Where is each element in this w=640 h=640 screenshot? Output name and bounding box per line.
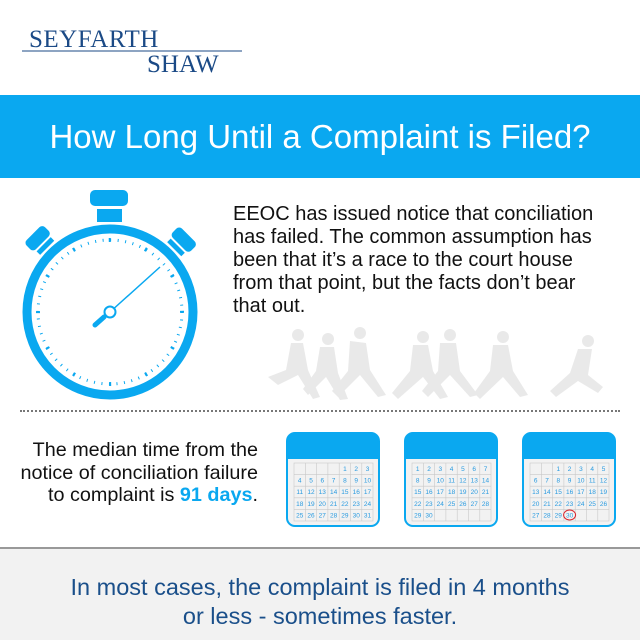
calendar: month 3: 20 [532, 501, 540, 508]
median text: notice of conciliation failure [20, 462, 258, 484]
calendar: month 2: 1 [416, 466, 420, 473]
calendar: month 1: 25 [296, 512, 304, 519]
calendar: month 3: 27 [532, 512, 540, 519]
calendar: month 2: 28 [482, 501, 489, 508]
calendar: month 1: 20 [319, 501, 326, 508]
calendar: month 3: 2 [568, 466, 572, 473]
calendar: month 2: 4 [450, 466, 454, 473]
calendar: month 1: 8 [343, 478, 347, 485]
calendar: month 1: 27 [319, 512, 326, 519]
calendar: month 2: 11 [448, 478, 455, 485]
calendar: month 2: 6 [472, 466, 476, 473]
calendar: month 2: 14 [482, 478, 489, 485]
calendar: month 3: 23 [566, 501, 574, 508]
calendar: month 1: 3 [366, 466, 370, 473]
runners silhouettes [268, 327, 603, 400]
calendar: month 1: 4 [298, 478, 302, 485]
calendar: month 3: 12 [600, 478, 607, 485]
calendar: month 3: 30 [566, 512, 574, 519]
intro text: EEOC has issued notice that conciliation [233, 203, 593, 225]
footer band: In most cases, the complaint is filed in 4 months [71, 574, 569, 600]
dotted divider [20, 410, 620, 412]
calendar: month 2: 16 [425, 489, 433, 496]
calendar: month 3: 5 [602, 466, 606, 473]
calendar: month 3: 3 [579, 466, 583, 473]
title banner [0, 95, 640, 178]
logo: SEYFARTH [29, 26, 159, 53]
calendar: month 2: 5 [461, 466, 465, 473]
calendar: month 1 [287, 433, 379, 526]
calendar: month 2: 8 [416, 478, 420, 485]
intro text: been that it’s a race to the court house [233, 249, 573, 271]
intro text [233, 203, 593, 317]
intro text: that out. [233, 295, 305, 317]
calendar: month 1: 16 [353, 489, 360, 496]
calendar: month 2: 18 [448, 489, 456, 496]
calendar: month 3: 1 [556, 466, 560, 473]
title banner: How Long Until a Complaint is Filed? [49, 118, 591, 155]
calendar: month 2: 22 [414, 501, 422, 508]
calendar: month 3: 29 [555, 512, 562, 519]
calendar: month 3: 6 [534, 478, 538, 485]
calendar: month 1: 10 [364, 478, 371, 485]
calendar: month 3: 19 [600, 489, 607, 496]
calendar: month 1: 14 [330, 489, 338, 496]
calendar: month 2: 20 [471, 489, 478, 496]
calendar: month 2: 13 [471, 478, 478, 485]
calendar: month 1: 12 [307, 489, 315, 496]
calendar: month 2: 29 [414, 512, 422, 519]
calendar: month 2: 15 [414, 489, 422, 496]
calendar: month 2: 24 [437, 501, 444, 508]
footer band: or less - sometimes faster. [183, 603, 457, 629]
calendar: month 3: 15 [555, 489, 562, 496]
calendar: month 1: 5 [309, 478, 313, 485]
calendar: month 3: 8 [556, 478, 560, 485]
calendar: month 1: 29 [341, 512, 349, 519]
calendar: month 3: 11 [589, 478, 596, 485]
calendar: month 1: 24 [364, 501, 371, 508]
calendar: month 2: 3 [438, 466, 442, 473]
calendar: month 1: 15 [341, 489, 349, 496]
calendar: month 1: 28 [330, 512, 338, 519]
median text: The median time from the [33, 439, 258, 461]
footer band [0, 547, 640, 640]
calendar: month 2: 17 [437, 489, 444, 496]
calendar: month 3: 21 [543, 501, 551, 508]
calendar: month 2 [405, 433, 497, 526]
calendar: month 3: 18 [589, 489, 596, 496]
calendars [286, 432, 616, 527]
calendar: month 3: 24 [577, 501, 585, 508]
logo [22, 26, 242, 76]
calendar: month 2: 19 [459, 489, 467, 496]
calendar: month 2: 30 [425, 512, 433, 519]
calendar: month 1: 31 [364, 512, 371, 519]
calendar: month 3: 9 [568, 478, 572, 485]
calendar: month 3: 17 [577, 489, 585, 496]
calendar: month 1: 30 [353, 512, 360, 519]
calendar: month 3 [523, 433, 615, 526]
calendar: month 1: 13 [319, 489, 326, 496]
calendar: month 1: 23 [353, 501, 360, 508]
icon: stopwatch [22, 190, 198, 400]
calendar: month 1: 17 [364, 489, 371, 496]
median text [20, 439, 258, 506]
calendar: month 3: 26 [600, 501, 607, 508]
calendar: month 2: 26 [459, 501, 467, 508]
calendar: month 1: 9 [354, 478, 358, 485]
calendar: month 2: 12 [459, 478, 467, 485]
calendar: month 1: 11 [296, 489, 303, 496]
median text: to complaint is 91 days. [48, 484, 258, 506]
calendar: month 1: 1 [343, 466, 347, 473]
calendar: month 3: 22 [555, 501, 562, 508]
calendar: month 1: 18 [296, 501, 304, 508]
calendar: month 2: 9 [427, 478, 431, 485]
calendar: month 3: 16 [566, 489, 574, 496]
intro text: has failed. The common assumption has [233, 226, 592, 248]
calendar: month 3: 7 [545, 478, 549, 485]
calendar: month 2: 23 [425, 501, 433, 508]
calendar: month 3: 25 [589, 501, 596, 508]
calendar: month 2: 27 [471, 501, 478, 508]
calendar: month 2: 7 [484, 466, 488, 473]
calendar: month 2: 2 [427, 466, 431, 473]
calendar: month 2: 25 [448, 501, 456, 508]
calendar: month 3: 4 [590, 466, 594, 473]
calendar: month 1: 19 [307, 501, 315, 508]
calendar: month 2: 21 [482, 489, 489, 496]
calendar: month 1: 21 [330, 501, 338, 508]
calendar: month 3: 14 [543, 489, 551, 496]
calendar: month 1: 22 [341, 501, 349, 508]
calendar: month 3: 13 [532, 489, 540, 496]
calendar: month 1: 26 [307, 512, 315, 519]
calendar: month 2: 10 [437, 478, 444, 485]
intro text: from that point, but the facts don’t bear [233, 272, 575, 294]
calendar: month 3: 10 [577, 478, 585, 485]
calendar: month 1: 7 [332, 478, 336, 485]
calendar: month 3: 28 [543, 512, 551, 519]
calendar: month 1: 6 [320, 478, 324, 485]
calendar: month 1: 2 [354, 466, 358, 473]
